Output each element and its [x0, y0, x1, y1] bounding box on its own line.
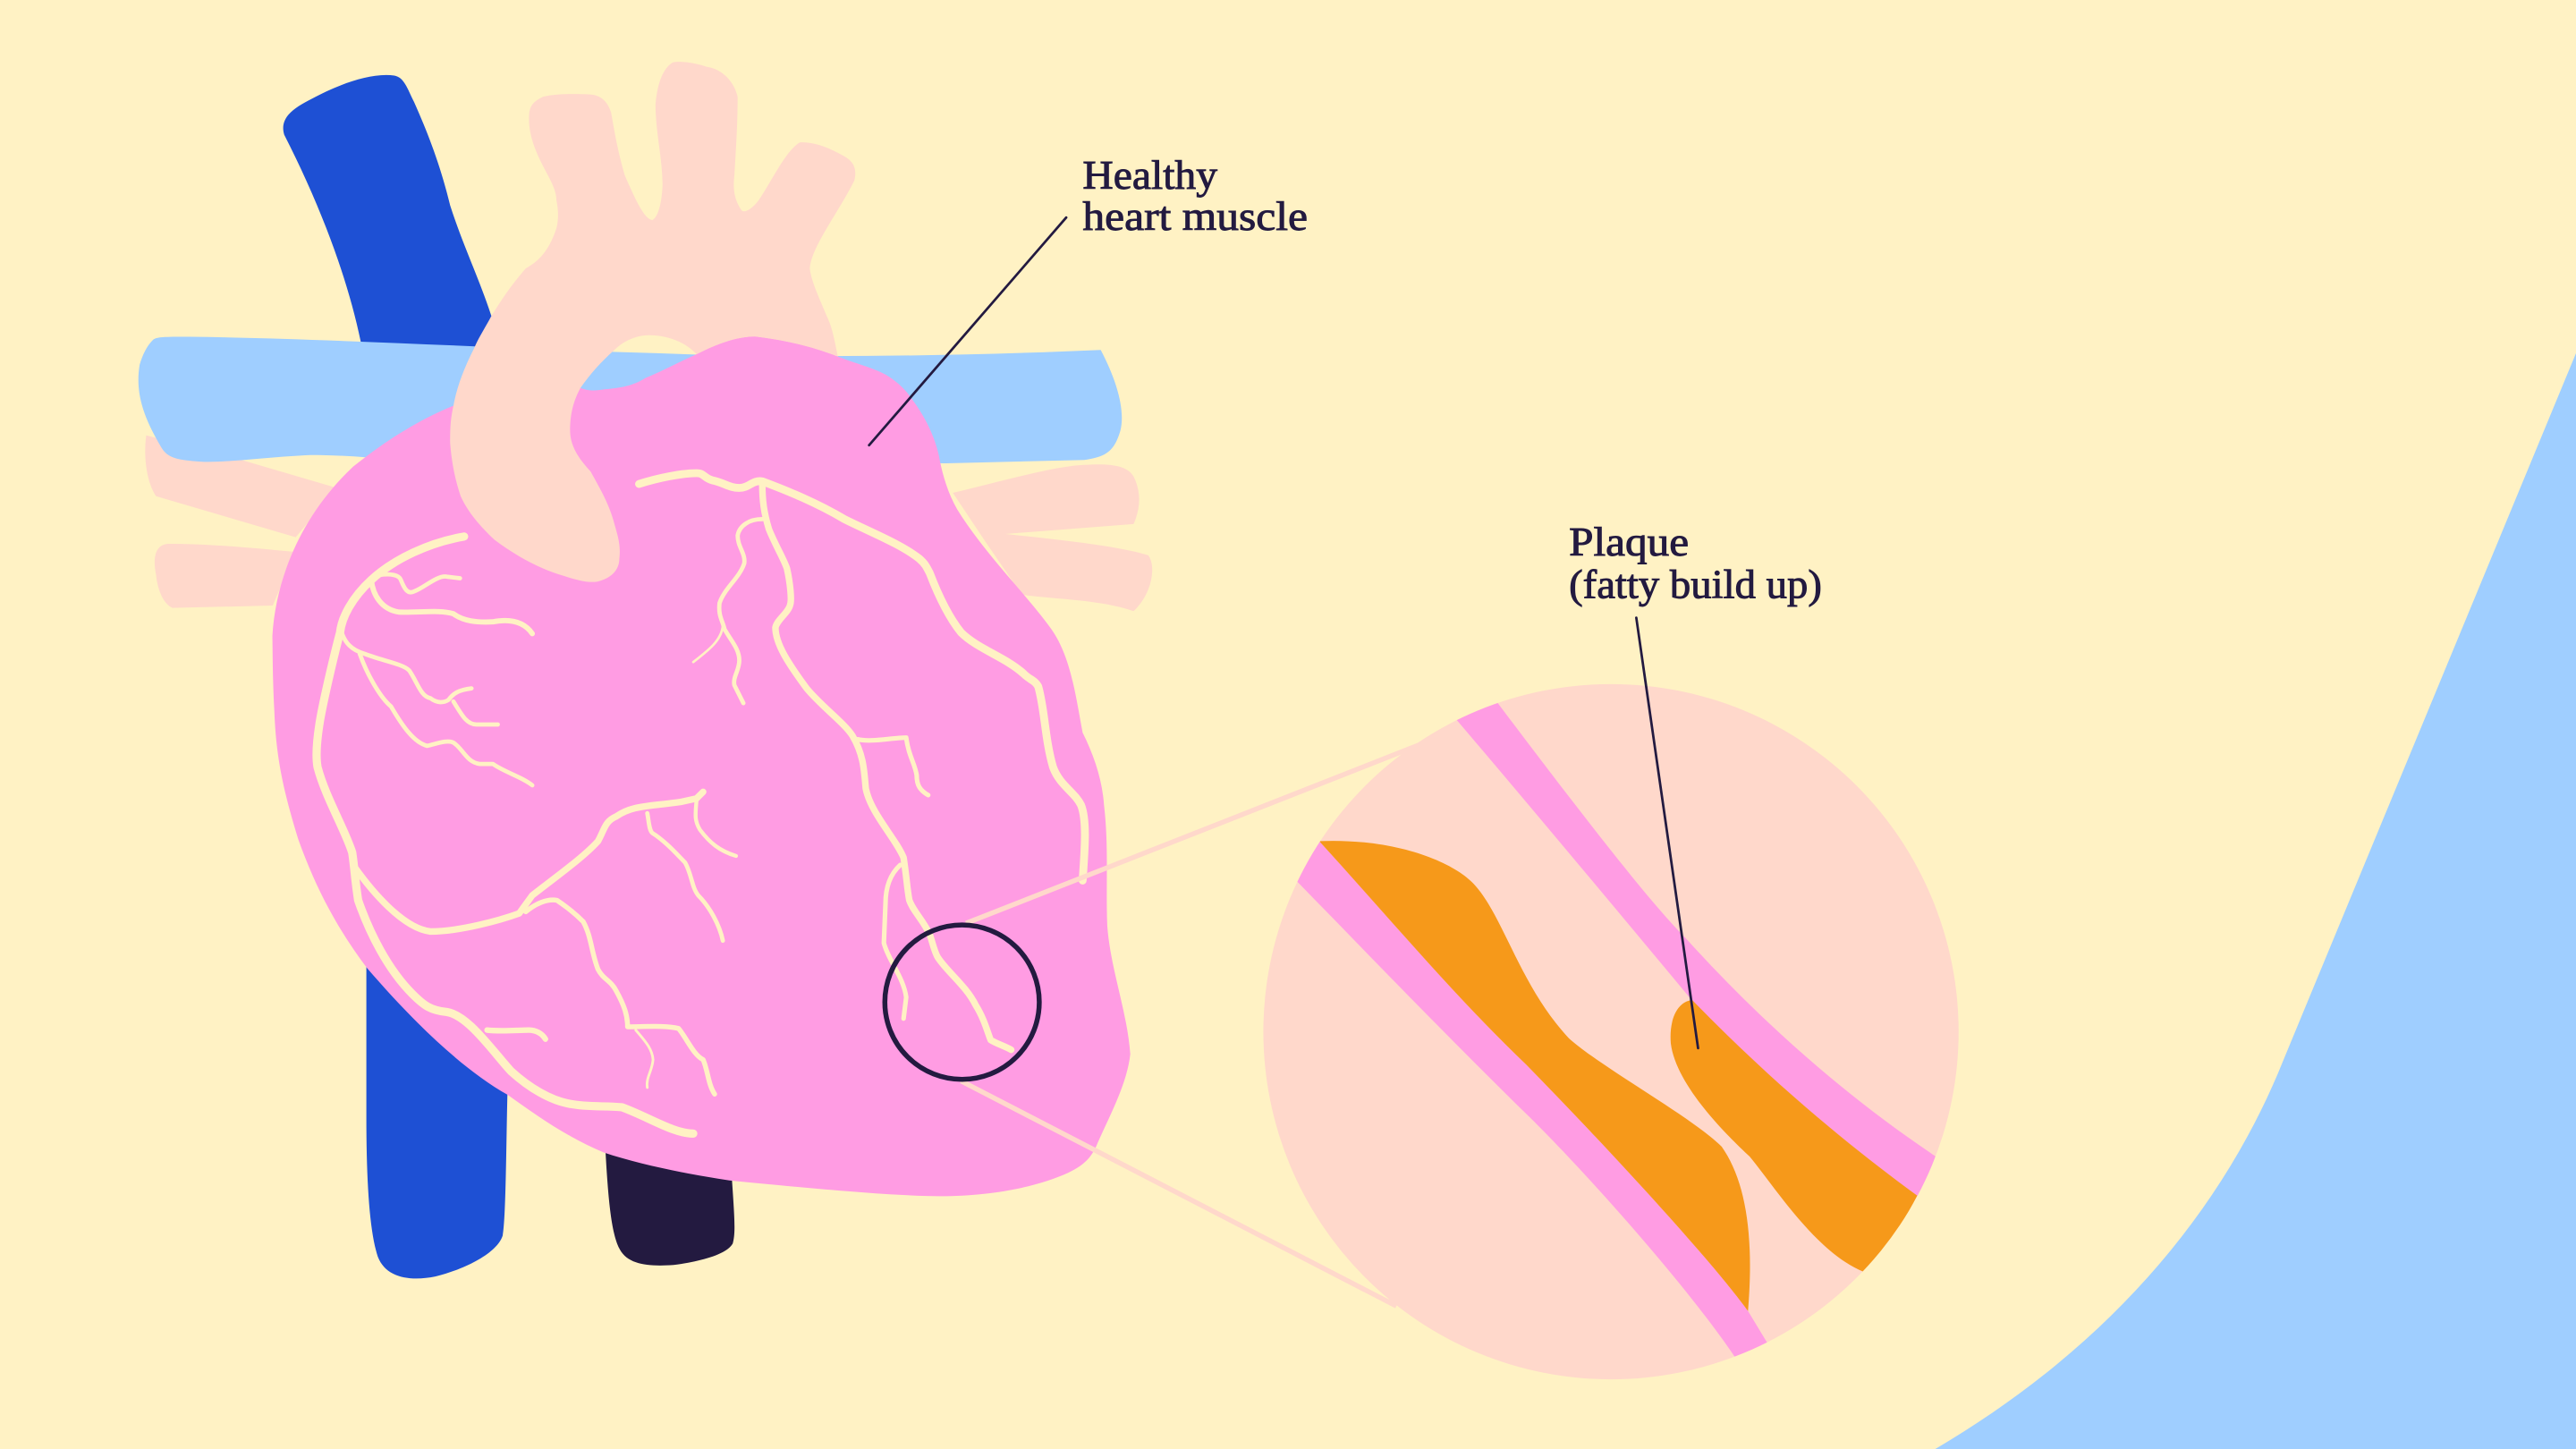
magnified artery lens: [1263, 684, 1959, 1379]
middle artery: [355, 792, 703, 931]
descending artery side branch: [858, 738, 928, 795]
upper left branch short: [379, 574, 460, 592]
middle artery branch right: [696, 800, 736, 856]
left branch fork: [453, 701, 498, 724]
coronary arteries: [317, 473, 1085, 1133]
label: healthy heart muscle: Healthy: [1082, 153, 1218, 198]
label: plaque: (fatty build up): [1569, 563, 1822, 607]
upper plaque: [1671, 1000, 1917, 1272]
zoom cone lines: [961, 738, 1437, 1306]
descending artery loop branch: [884, 865, 906, 1019]
lower plaque: [1319, 841, 1750, 1311]
left main artery: [317, 537, 693, 1133]
navy lower vessel: [605, 1133, 734, 1266]
upper artery wall: [1456, 703, 1936, 1196]
main right artery: [639, 473, 1085, 880]
descending artery: [762, 483, 1012, 1050]
middle artery branch centre: [648, 813, 723, 941]
light blue horizontal vessel: [139, 337, 1122, 463]
leader line: plaque: [1636, 618, 1698, 1048]
upper left branch long: [371, 580, 532, 633]
leader line: healthy heart muscle: [869, 217, 1066, 445]
artery cross-section: [1297, 703, 1936, 1357]
label: plaque: Plaque: [1569, 520, 1689, 564]
lower thin branch: [636, 1030, 653, 1088]
left branch lower: [360, 654, 532, 785]
lower artery branch: [526, 900, 715, 1094]
right ribs vessels: [953, 464, 1152, 611]
label: healthy heart muscle: heart muscle: [1082, 194, 1308, 239]
aorta and pulmonary arteries: [450, 62, 855, 582]
dark blue lower vein: [367, 953, 508, 1278]
central small branch: [719, 519, 762, 703]
magnifier ring: [885, 925, 1039, 1080]
lower left side branch: [487, 1030, 546, 1039]
left branch middle: [340, 626, 471, 702]
left ribs vessels: [145, 436, 337, 608]
blue corner shape: [1936, 353, 2576, 1449]
central thin branch: [693, 626, 723, 662]
lower artery wall: [1297, 843, 1767, 1357]
heart muscle: [273, 336, 1131, 1196]
dark blue upper vein: [284, 75, 493, 353]
